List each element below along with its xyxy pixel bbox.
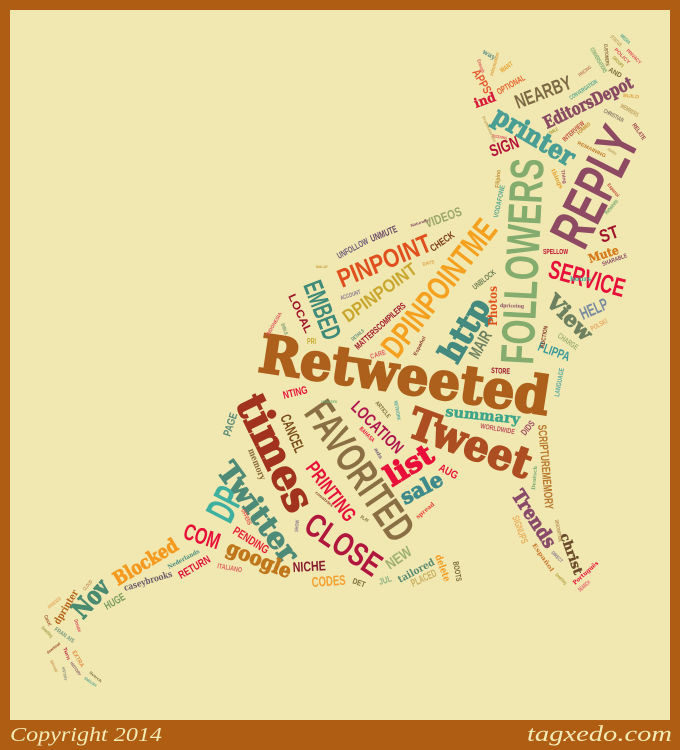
small words: head and ears: BUILD <box>623 93 640 100</box>
word: REPLY: REPLY <box>538 116 653 258</box>
small words: medium stencil and slab labels: spread <box>415 501 437 521</box>
small words: medium stencil and slab labels: PLACED <box>409 567 439 590</box>
word: Twitter: Twitter <box>210 455 306 570</box>
small words: tail tip: FRAN AIS <box>53 627 75 645</box>
small words: medium stencil and slab labels: CANCEL <box>276 412 308 455</box>
small words: right flank: MAIR <box>465 327 496 362</box>
word: View: View <box>541 288 599 346</box>
small words: right flank: UNMUTE <box>369 224 399 245</box>
small words: right flank: LOCAL <box>285 292 314 336</box>
small words: right flank: UNFOLLOW <box>335 236 370 261</box>
small words: medium stencil and slab labels: AUG <box>437 462 460 482</box>
small words: head and ears: MEDIA <box>619 33 632 46</box>
small words: right flank: Mute <box>587 243 621 266</box>
word: list: list <box>378 437 440 493</box>
small words: medium stencil and slab labels: Deutsch <box>531 465 539 490</box>
small words: medium stencil and slab labels: DIDS <box>519 419 537 437</box>
small words: head and ears: GROUPS <box>611 55 625 70</box>
small words: medium stencil and slab labels: SEARCH <box>577 580 592 594</box>
small words: tail tip: BRAND <box>49 659 59 673</box>
small words: tail tip: CLOUD <box>82 579 94 592</box>
small words: tail tip: ANNEXED <box>47 596 63 611</box>
small words: right flank: ST <box>597 221 621 247</box>
small words: medium stencil and slab labels: HUGE <box>102 591 128 613</box>
word: google: google <box>223 535 295 583</box>
small words: medium stencil and slab labels: DESCRIPTION <box>553 519 563 542</box>
small words: head and ears: Professionals <box>481 115 498 144</box>
small words: head and ears: CHRISTIAN <box>602 108 624 124</box>
small words: head and ears: SMILE <box>548 126 560 137</box>
small words: right flank: BIBLE <box>279 323 289 336</box>
small words: right flank: VIDEOS <box>423 204 464 231</box>
small words: head and ears: Enough <box>475 59 486 74</box>
small words: medium stencil and slab labels: caseybrooks <box>123 570 174 594</box>
small words: right flank: PLAY <box>359 515 370 524</box>
small words: head and ears: ind <box>472 90 498 112</box>
small words: head and ears: Espanol <box>605 182 621 199</box>
small words: medium stencil and slab labels: christ <box>556 531 585 577</box>
small words: right flank: hours <box>570 276 592 283</box>
small words: tail tip: Turn <box>61 647 71 661</box>
word: FOLLOWERS: FOLLOWERS <box>490 157 554 366</box>
small words: head and ears: things <box>549 168 565 190</box>
word: EditorsDepot: EditorsDepot <box>540 73 637 134</box>
small words: medium stencil and slab labels: Español <box>530 542 556 574</box>
small words: head and ears: way <box>480 46 498 62</box>
small words: right flank: Photos <box>486 286 500 326</box>
small words: medium stencil and slab labels: ITALIANO <box>217 563 243 574</box>
small words: right flank: AUCTION <box>540 326 550 348</box>
word: http: http <box>431 291 498 369</box>
small words: head and ears: PRIVACY <box>625 48 643 66</box>
small words: medium stencil and slab labels: DIRECT <box>550 550 564 564</box>
small words: right flank: CHARGE <box>556 331 580 352</box>
word: PINPOINT: PINPOINT <box>333 228 436 294</box>
word: Blocked: Blocked <box>109 534 182 590</box>
small words: medium stencil and slab labels: BOOTS <box>451 561 463 582</box>
small words: head and ears: POLICY <box>613 47 631 66</box>
small words: medium stencil and slab labels: WORLDWIDE <box>480 423 516 436</box>
small words: head and ears: CONVERSATION <box>569 79 599 102</box>
small words: head and ears: AND <box>607 67 623 80</box>
small words: right flank: CARE <box>369 349 387 361</box>
small words: medium stencil and slab labels: Nederlands <box>167 548 201 571</box>
small words: medium stencil and slab labels: SIGNUPS <box>509 514 530 545</box>
word: printer: printer <box>487 101 580 173</box>
small words: tail tip: Sverch <box>88 670 104 684</box>
small words: right flank: STORE <box>491 366 511 376</box>
small words: right flank: LANGUAGE <box>554 367 566 397</box>
small words: right flank: ACCOUNT <box>340 290 362 302</box>
small words: right flank: countries <box>314 490 335 508</box>
small words: head and ears: PRICING <box>578 65 593 79</box>
small words: head and ears: APPS <box>469 66 495 96</box>
small words: head and ears: VODAFONE <box>493 184 507 218</box>
small words: right flank: INDONESIA <box>266 311 284 337</box>
small words: medium stencil and slab labels: Português <box>572 559 601 586</box>
small words: head and ears: Filipino <box>495 169 503 188</box>
small words: right flank: NETWORK <box>392 400 401 421</box>
small words: right flank: UPDATES <box>321 399 337 404</box>
small words: right flank <box>239 204 628 532</box>
small words: tail tip: Cancel <box>42 614 52 627</box>
word: EMBED: EMBED <box>297 276 347 344</box>
word: NEARBY: NEARBY <box>512 72 575 114</box>
small words: right flank: OFFERS <box>239 508 252 526</box>
word: SERVICE: SERVICE <box>545 254 629 303</box>
small words: right flank: PRI <box>307 337 316 346</box>
word: DPINPOINTME: DPINPOINTME <box>373 212 504 364</box>
word: sale: sale <box>396 466 447 509</box>
small words: right flank: dpriceing <box>500 303 525 310</box>
small words: tail tip: ENGLISH <box>83 676 98 688</box>
small words: head and ears <box>469 33 646 218</box>
small words: medium stencil and slab labels: delete <box>432 553 452 583</box>
small words: head and ears: INTERVIEW <box>562 120 587 143</box>
small words: right flank: SPELLOW <box>543 249 568 256</box>
word: Tweet: Tweet <box>402 398 539 488</box>
word: COM: COM <box>180 518 224 554</box>
small words: tail tip <box>40 579 104 688</box>
word: DPINPOINT: DPINPOINT <box>339 259 421 326</box>
footer: copyright: Copyright 2014 <box>10 724 162 746</box>
small words: head and ears: Thing <box>559 169 567 184</box>
small words: medium stencil and slab labels: tailored <box>396 557 437 586</box>
word: PRINTING: PRINTING <box>301 458 360 526</box>
small words: tail tip: EXTRA <box>70 650 85 669</box>
small words: tail tip: HISTORY <box>69 661 83 677</box>
small words: medium stencil and slab labels: PAGE <box>221 411 240 438</box>
small words: right flank: CHECK <box>428 230 457 254</box>
word: Nov: Nov <box>66 573 116 624</box>
word: summary: summary <box>445 404 522 428</box>
footer: site name: tagxedo.com <box>527 721 672 746</box>
small words: medium stencil and slab labels: memory <box>245 447 267 482</box>
small words: medium stencil and slab labels: NEW <box>383 543 416 573</box>
small words: head and ears: Information <box>489 52 501 77</box>
word: Retweeted: Retweeted <box>255 324 554 428</box>
small words: right flank: MATTERSCOMPILERS <box>353 301 408 351</box>
small words: medium stencil and slab labels: PENDING <box>230 524 272 557</box>
small words: medium stencil and slab labels <box>52 384 601 627</box>
small words: head and ears: REMAINING <box>576 140 607 159</box>
small words: right flank: DAYS <box>422 259 436 268</box>
small words: right flank: SHOW <box>294 519 301 532</box>
small words: head and ears: CUSTOMERS <box>602 44 610 67</box>
word: FAVORITED: FAVORITED <box>296 392 425 550</box>
small words: right flank: FLIPPA <box>536 339 573 364</box>
small words: head and ears: RECEIVING <box>492 133 507 141</box>
small words: right flank: ARTICLE <box>373 400 391 420</box>
word: times: times <box>226 386 325 520</box>
small words: right flank: UNBLOCK <box>471 268 498 292</box>
small words: right flank: MALAY <box>316 264 328 269</box>
small words: medium stencil and slab labels: DET <box>351 576 367 589</box>
small words: head and ears: OPTIONAL <box>495 72 527 97</box>
small words: right flank: Naturally <box>410 217 430 228</box>
word: DP: DP <box>197 479 253 529</box>
small words: head and ears: STATUS <box>609 34 623 49</box>
small words: right flank: Español <box>412 335 428 357</box>
small words: right flank: ads <box>372 447 384 461</box>
small words: right flank: POLSKI <box>590 318 609 333</box>
small words: tail tip: Donate <box>72 619 82 633</box>
small words: tail tip: Something <box>40 625 54 639</box>
small words: right flank: DETAILS <box>350 328 366 343</box>
small words: head and ears: CONVERSATIONS <box>588 47 607 74</box>
small words: right flank: BAHASA <box>358 426 376 444</box>
small words: medium stencil and slab labels: CODES <box>311 572 346 590</box>
word: Trends: Trends <box>507 486 561 552</box>
small words: head and ears: MEMBERS <box>619 104 639 119</box>
word: LOCATION: LOCATION <box>347 397 407 457</box>
small words: head and ears: Ability <box>606 147 618 156</box>
small words: medium stencil and slab labels: Something <box>554 572 568 586</box>
small words: head and ears: SIGN <box>487 133 522 161</box>
small words: medium stencil and slab labels: JUL <box>378 573 393 587</box>
small words: tail tip: download <box>46 641 62 655</box>
small words: right flank: SHARABLE <box>602 253 628 268</box>
small words: medium stencil and slab labels: dprinter <box>52 588 81 627</box>
small words: medium stencil and slab labels: NICHE <box>292 557 326 575</box>
small words: head and ears: RELATE <box>630 123 646 142</box>
small words: head and ears: FORMED <box>576 121 592 136</box>
small words: medium stencil and slab labels: NTING <box>282 384 309 402</box>
small words: head and ears: WANT <box>499 61 515 75</box>
small words: right flank: HELP <box>577 295 611 324</box>
small words: medium stencil and slab labels: RETURN <box>176 554 213 582</box>
small words: head and ears: Retweets <box>604 198 620 216</box>
word cloud: cat silhouette <box>40 33 653 688</box>
small words: medium stencil and slab labels: SCRIPTUREMEMORY <box>535 424 556 510</box>
word: CLOSE: CLOSE <box>298 505 389 583</box>
small words: tail tip: HISTORY <box>61 666 68 681</box>
